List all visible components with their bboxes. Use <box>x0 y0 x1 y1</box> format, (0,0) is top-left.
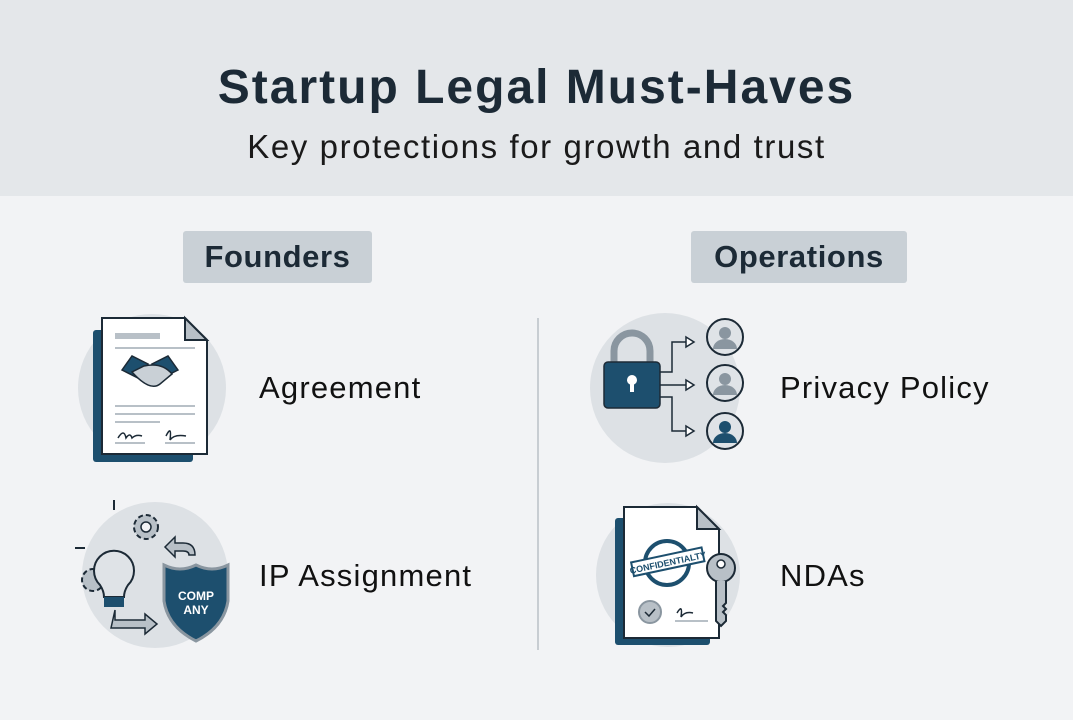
heading: Operations: Operations <box>714 239 884 274</box>
icon: privacy lock <box>590 313 743 463</box>
icon: IP assignment <box>75 500 228 648</box>
title: Startup Legal Must-Haves <box>218 61 855 114</box>
heading: Founders: Founders <box>204 239 351 274</box>
header band <box>0 0 1073 196</box>
icon: IP assignment: COMP <box>178 589 214 603</box>
subtitle: Key protections for growth and trust <box>247 128 826 165</box>
label: IP Assignment: IP Assignment <box>259 558 472 593</box>
heading: Operations <box>691 231 907 283</box>
heading: Founders <box>183 231 372 283</box>
icon: NDA document with key: CONFIDENTIALTY <box>629 550 707 576</box>
label: NDAs: NDAs <box>780 558 866 593</box>
icon: agreement document <box>78 314 226 462</box>
icon: NDA document with key <box>596 503 740 647</box>
label: Privacy Policy: Privacy Policy <box>780 370 990 405</box>
label: Agreement: Agreement <box>259 370 421 405</box>
icon: IP assignment: ANY <box>183 603 209 617</box>
